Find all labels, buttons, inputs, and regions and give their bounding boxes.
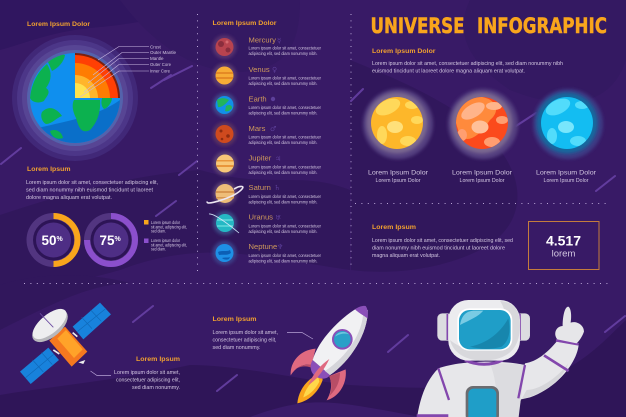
heading: earth layers: Lorem Ipsum Dolor — [27, 21, 90, 28]
donut chart: 50% — [26, 213, 80, 267]
donut chart: 75%: 75 — [100, 233, 115, 248]
planet: jupiter — [213, 152, 321, 176]
donut chart: 75%: % — [115, 236, 122, 243]
text block: stat paragraph: magna aliquam erat volutpat. — [372, 253, 440, 259]
text block: rocket paragraph: sed diam nonummy. — [212, 345, 261, 351]
donut chart: 50%: 50 — [42, 233, 57, 248]
heading: planets: Lorem Ipsum Dolor — [212, 20, 277, 27]
text block: rocket paragraph: consectetuer adipiscing elit, — [212, 338, 277, 344]
earth cross-section chart — [12, 35, 138, 161]
title — [370, 14, 607, 39]
planet: earth: Earth — [248, 94, 267, 104]
illustration: rocket — [291, 306, 368, 403]
helmet — [448, 300, 520, 361]
legend: sit amet, adipiscing elit, — [151, 224, 187, 230]
earth layer labels: Mantle — [150, 56, 164, 61]
stat box — [528, 222, 599, 270]
planet: venus: Lorem ipsum dolor sit amet, consectetuer — [248, 76, 321, 80]
text block: left paragraph — [26, 180, 158, 201]
heading: rocket: Lorem Ipsum — [212, 316, 256, 323]
donut chart: 50%: % — [57, 236, 64, 243]
text block: stars paragraph — [372, 61, 563, 74]
planet: saturn — [207, 182, 321, 206]
background streaks — [1, 66, 625, 391]
star captions: Lorem Ipsum Dolor — [376, 178, 421, 184]
planet: jupiter: adipiscing elit, sed diam nonummy nibh. — [248, 170, 318, 175]
planet: saturn: Lorem ipsum dolor sit amet, consectetuer — [248, 194, 321, 199]
planet: earth: Lorem ipsum dolor sit amet, consectetuer — [248, 105, 321, 110]
planet: uranus: Uranus — [248, 212, 273, 222]
planet: neptune — [212, 241, 321, 265]
text block: rocket paragraph — [212, 330, 278, 351]
illustration: satellite — [20, 303, 111, 384]
title: UNIVERSE — [370, 14, 464, 39]
planet: mercury: adipiscing elit, sed diam nonummy nibh. — [248, 51, 318, 56]
planet: saturn: adipiscing elit, sed diam nonummy nibh. — [248, 199, 318, 204]
text block: stars paragraph: Lorem ipsum dolor sit amet, consectetuer adipiscing elit, sed diam nonummy nibh — [372, 61, 563, 67]
heading: satellite: Lorem Ipsum — [136, 356, 180, 363]
earth layer labels: Crust — [150, 44, 162, 49]
planet: venus: adipiscing elit, sed diam nonummy nibh. — [248, 81, 318, 86]
stat box: 4.517 — [546, 232, 581, 248]
text block: stars paragraph: euismod tincidunt ut laoreet dolore magna aliquam erat volutpat. — [372, 68, 525, 74]
planet: mars: adipiscing elit, sed diam nonummy nibh. — [248, 140, 318, 145]
text block: satellite paragraph: sed diam nonummy. — [132, 385, 180, 391]
earth layer labels — [80, 44, 176, 97]
arm — [518, 342, 579, 400]
planet: uranus — [209, 211, 321, 235]
text block: left paragraph: sed diam nonummy nibh euismod tincidunt ut laoreet — [26, 188, 153, 194]
planet: venus — [212, 64, 321, 88]
heading: stars: Lorem Ipsum Dolor — [372, 48, 436, 55]
donut chart: 75% — [84, 213, 138, 267]
star: red — [448, 89, 518, 159]
planet: saturn: Saturn — [248, 183, 271, 192]
star captions: Lorem Ipsum Dolor — [544, 178, 589, 184]
planet: mars: Mars — [248, 124, 266, 133]
text block: stat paragraph: Lorem ipsum dolor sit amet, consectetuer adipiscing elit, sed — [372, 238, 513, 244]
planet: mercury: Lorem ipsum dolor sit amet, consectetuer — [248, 46, 321, 51]
planet: earth — [212, 93, 321, 117]
legend: Lorem ipsum dolor — [151, 220, 180, 225]
star captions: Lorem Ipsum Dolor — [452, 170, 513, 176]
illustration: astronaut — [417, 300, 584, 417]
ear pieces — [437, 313, 452, 341]
planet: venus: Venus — [248, 65, 270, 74]
planet: neptune: ♆ — [277, 243, 283, 251]
planet: mars: ♂ — [270, 125, 276, 133]
planet: earth: adipiscing elit, sed diam nonummy nibh. — [248, 110, 318, 115]
text block: stat paragraph: diam nonummy nibh euismod tincidunt ut laoreet dolore — [372, 246, 505, 252]
legend: sit amet, adipiscing elit, — [151, 242, 187, 248]
planet list — [207, 35, 321, 265]
earth layer labels: Outer Core — [150, 62, 171, 67]
star captions: Lorem Ipsum Dolor — [368, 170, 429, 176]
star captions: Lorem Ipsum Dolor — [536, 170, 597, 176]
planet: saturn: ♄ — [274, 184, 280, 192]
text block: satellite paragraph: consectetuer adipiscing elit, — [116, 378, 180, 384]
visor — [457, 308, 512, 351]
planet: neptune: Lorem ipsum dolor sit amet, consectetuer — [248, 253, 321, 258]
star captions — [368, 170, 597, 184]
text block: satellite paragraph: Lorem ipsum dolor sit amet, — [114, 370, 180, 376]
planet: jupiter: Lorem ipsum dolor sit amet, consectetuer — [248, 164, 321, 170]
legend — [144, 220, 187, 252]
heading: stat: Lorem Ipsum — [372, 224, 416, 231]
planet: neptune: adipiscing elit, sed diam nonummy nibh. — [248, 258, 318, 263]
planet: uranus: adipiscing elit, sed diam nonummy nibh. — [248, 229, 318, 234]
text block: left paragraph: dolore magna aliquam erat volutpat. — [26, 195, 112, 201]
planet: mercury — [212, 35, 321, 59]
text block: stat paragraph — [372, 238, 513, 259]
heading: lorem ipsum: Lorem Ipsum — [27, 166, 70, 173]
body — [417, 362, 525, 417]
planet: neptune: Neptune — [248, 242, 277, 251]
star: blue — [533, 89, 603, 159]
callout line: rocket — [287, 332, 313, 339]
callout line: satellite — [90, 371, 111, 376]
planet: venus: ♀ — [272, 66, 277, 74]
star captions: Lorem Ipsum Dolor — [460, 178, 505, 184]
dotted dividers — [24, 14, 610, 284]
planet: uranus: Lorem ipsum dolor sit amet, consectetuer — [248, 224, 321, 228]
legend: Lorem ipsum dolor — [151, 238, 180, 243]
planet: mercury: ☿ — [277, 37, 281, 45]
text block: satellite paragraph — [114, 370, 180, 391]
planet: mars: Lorem ipsum dolor sit amet, consectetuer — [248, 135, 321, 140]
legend: sed diam. — [151, 246, 166, 252]
planet: jupiter: ♃ — [275, 155, 281, 163]
planet: uranus: ♅ — [275, 214, 281, 222]
text block: rocket paragraph: Lorem ipsum dolor sit amet, — [212, 330, 278, 336]
text block: left paragraph: Lorem ipsum dolor sit amet, consectetuer adipiscing elit, — [26, 180, 158, 186]
earth layer labels: Inner Core — [150, 68, 170, 74]
legend: sed diam. — [151, 228, 166, 234]
hand — [555, 307, 584, 343]
planet: jupiter: Jupiter — [248, 154, 272, 162]
star: yellow — [363, 89, 433, 159]
planet: mars — [212, 122, 321, 146]
chest window — [466, 386, 499, 417]
planet: mercury: Mercury — [248, 36, 276, 44]
earth layer labels: Outer Mantle — [150, 50, 176, 55]
stat box: lorem — [552, 248, 575, 260]
